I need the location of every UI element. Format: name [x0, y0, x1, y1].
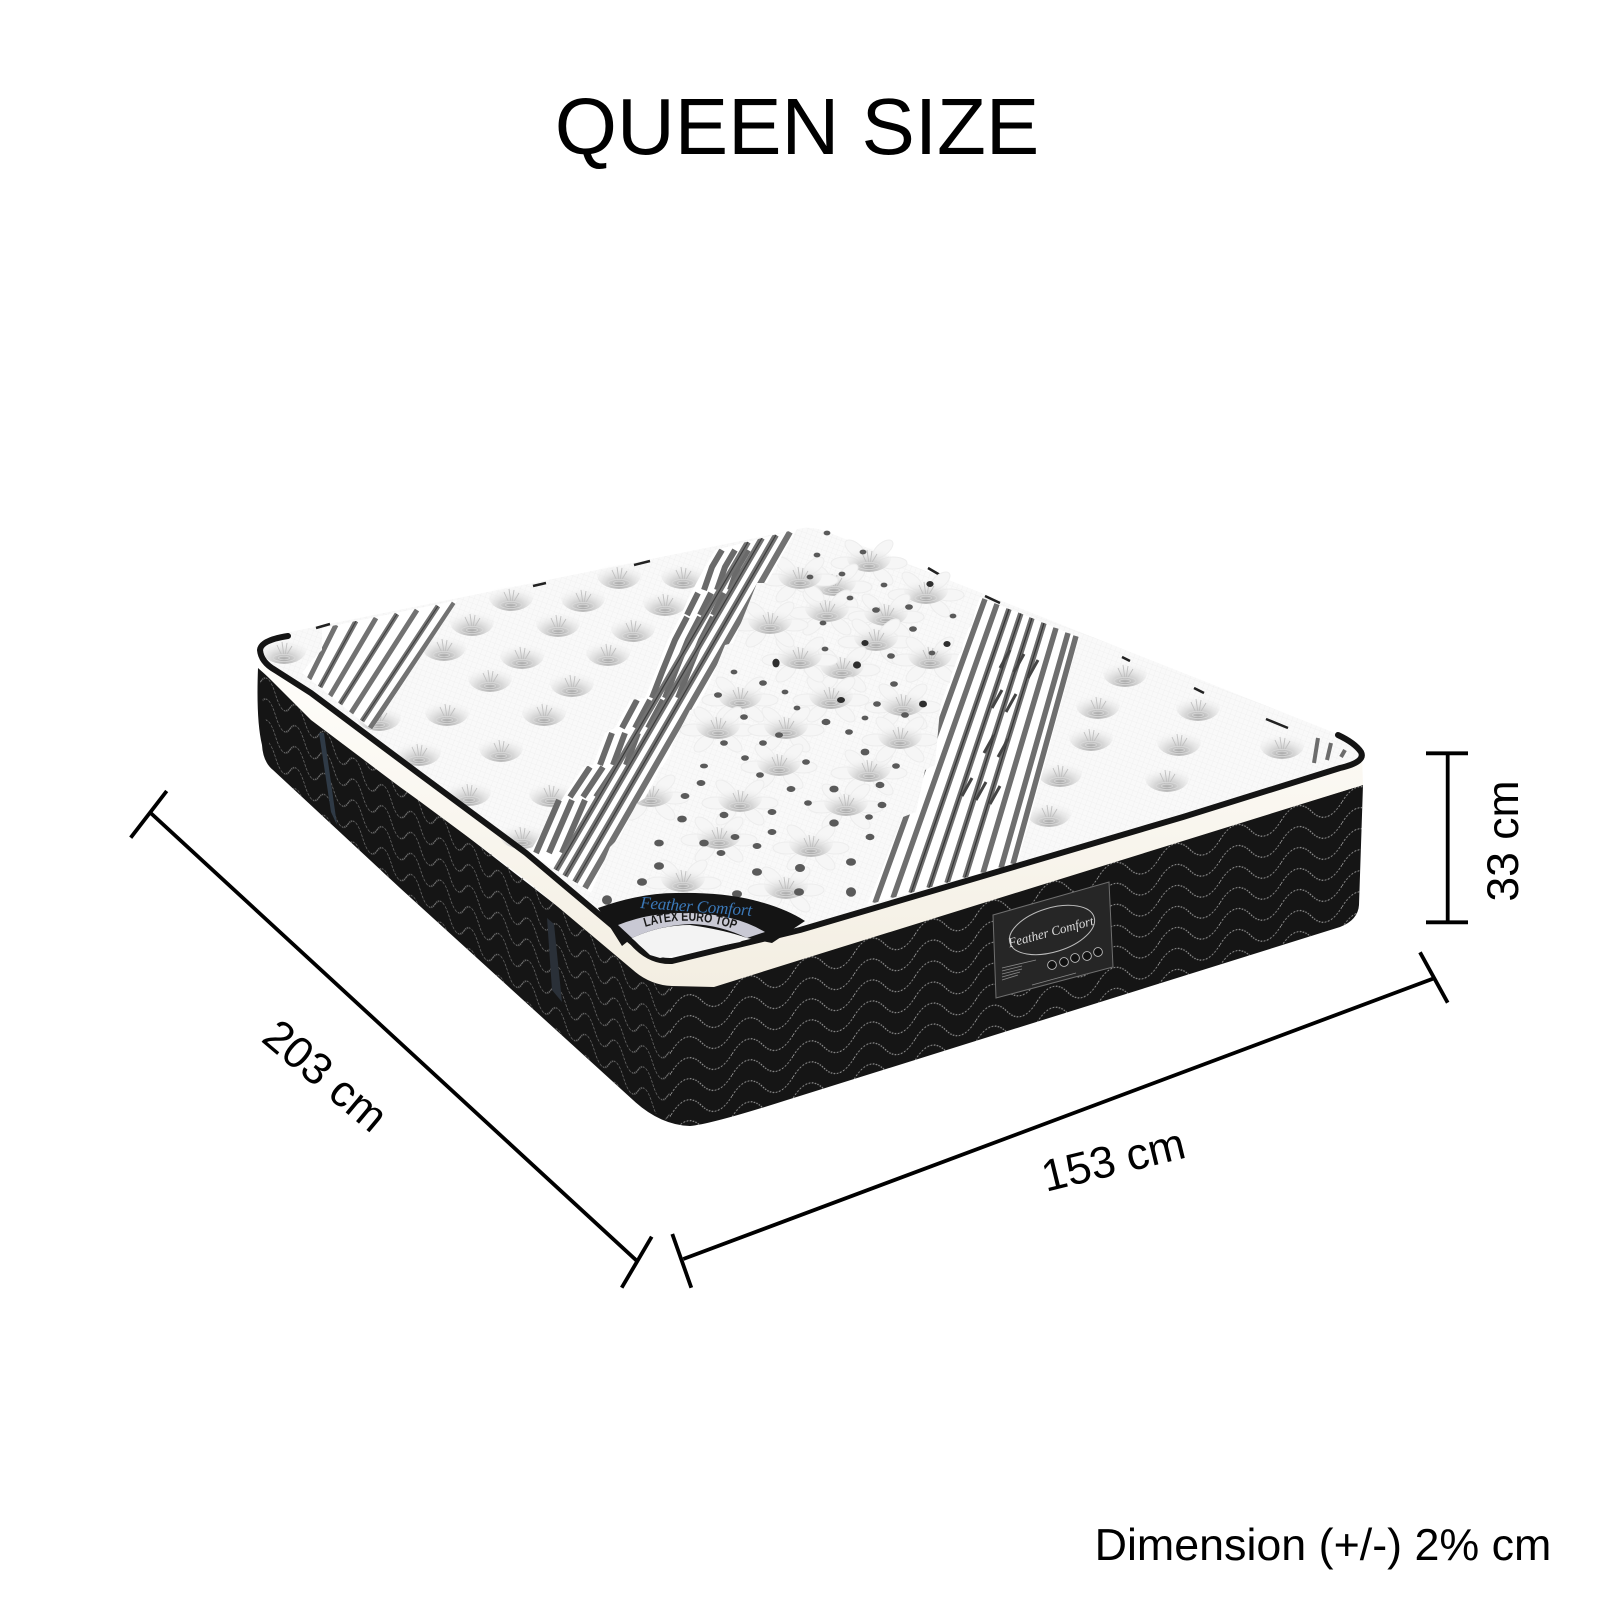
- stripe band 2: [529, 529, 797, 893]
- title: QUEEN SIZE: [555, 82, 1039, 171]
- stripe band 3: [867, 597, 1079, 905]
- dimension: depth 203 cm: [131, 791, 652, 1288]
- height tick bottom: [1426, 920, 1468, 924]
- label icons: [1048, 948, 1102, 969]
- badge ribbon: [618, 913, 765, 938]
- height tick top: [1426, 751, 1468, 755]
- label oval: [1003, 896, 1101, 964]
- label 33 cm: 33 cm: [1479, 780, 1528, 902]
- depth line: [151, 813, 637, 1261]
- width tick end: [1420, 952, 1448, 1003]
- stripe band 1: [302, 600, 458, 730]
- width tick start: [672, 1234, 691, 1288]
- mesh dots: [602, 531, 956, 904]
- corner badge: [598, 892, 805, 958]
- tufts middle panel: [613, 537, 968, 915]
- width line: [683, 978, 1434, 1259]
- badge label: LATEX EURO TOP: [643, 912, 738, 928]
- stepped stripes: [536, 550, 748, 853]
- depth tick start: [131, 791, 167, 838]
- height line: [1446, 753, 1450, 922]
- brand label: [993, 882, 1113, 998]
- label fine print: [1002, 960, 1076, 985]
- strap left: [319, 733, 337, 825]
- badge inner knit: [632, 925, 747, 958]
- quilted left side: [258, 668, 670, 1122]
- label 203 cm: 203 cm: [253, 1010, 397, 1142]
- strap front: [547, 918, 562, 1002]
- knit texture: [262, 528, 1360, 961]
- continuous stripes: [556, 532, 790, 888]
- dimension: width 153 cm: [672, 952, 1448, 1288]
- top quilted surface: [262, 528, 1360, 961]
- quilted front side: [670, 785, 1363, 1126]
- label 153 cm: 153 cm: [1037, 1119, 1190, 1202]
- badge black arch: [598, 893, 805, 946]
- tufts left panel: [262, 561, 705, 849]
- mattress base: [258, 668, 1363, 1126]
- mattress: [257, 528, 1365, 1126]
- piping: [260, 636, 1362, 961]
- badge script: Feather Comfort: [639, 893, 754, 920]
- footnote: Dimension (+/-) 2% cm: [1095, 1520, 1551, 1570]
- tufts right panel: [1027, 659, 1304, 827]
- label plate: [993, 882, 1113, 998]
- label logo text: Feather Comfort: [1006, 913, 1096, 951]
- stripe band 4: [1314, 738, 1345, 763]
- foam band: [259, 660, 1363, 987]
- dimension: height 33 cm: [1426, 753, 1468, 922]
- dark tuft dots: [772, 581, 951, 707]
- back edge fragments: [316, 561, 1288, 728]
- depth tick end: [622, 1237, 652, 1288]
